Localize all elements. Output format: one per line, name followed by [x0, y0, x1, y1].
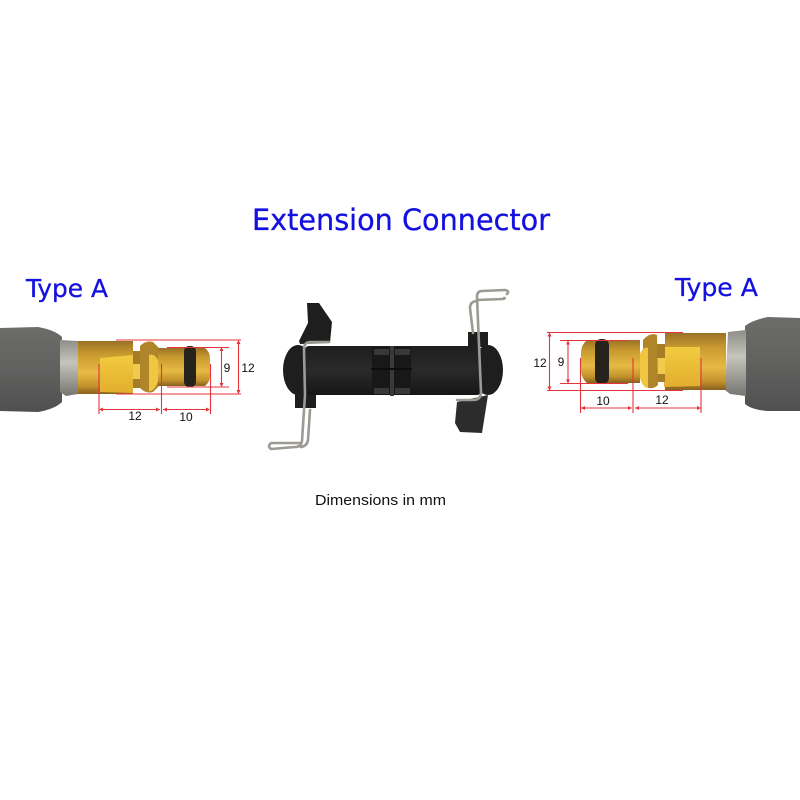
- right dimension numbers: 12: [655, 393, 669, 407]
- right dimension numbers: 9: [558, 355, 565, 369]
- right wire clip: [457, 290, 508, 400]
- left dimension numbers: 9: [224, 361, 231, 375]
- label: left Type A: Type A: [25, 274, 108, 303]
- left dimension numbers: 12: [241, 361, 255, 375]
- label: right Type A: Type A: [674, 273, 758, 302]
- title: Extension Connector: [252, 203, 550, 237]
- left dimension lines: [99, 340, 241, 414]
- left wire clip: [269, 342, 329, 449]
- right dimension lines: [547, 332, 701, 413]
- left dimension numbers: 12: [128, 409, 142, 423]
- right dimension numbers: 12: [533, 356, 547, 370]
- left hose fitting: [0, 327, 210, 412]
- right dimension numbers: [533, 355, 669, 408]
- right dimension numbers: 10: [596, 394, 610, 408]
- left dimension numbers: 10: [179, 410, 193, 424]
- center connector: [269, 290, 508, 449]
- caption: Dimensions in mm: [315, 492, 446, 509]
- right hose fitting: [581, 317, 800, 411]
- left dimension numbers: [128, 361, 255, 424]
